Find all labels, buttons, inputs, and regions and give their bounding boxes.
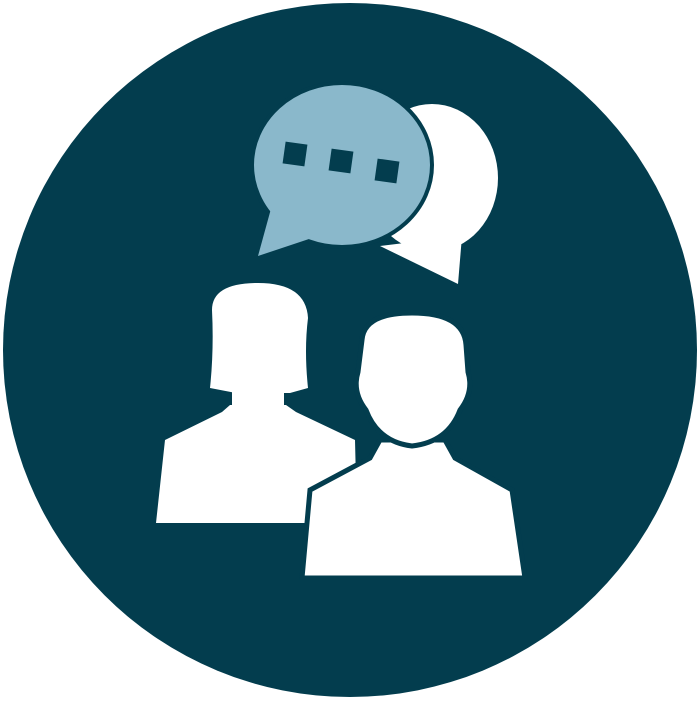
dots <box>283 142 399 183</box>
icon: blue speech bubble with dots <box>252 83 432 256</box>
icon: white speech bubble <box>366 104 498 284</box>
icon: man silhouette <box>302 313 525 578</box>
icon: woman silhouette <box>156 283 357 523</box>
